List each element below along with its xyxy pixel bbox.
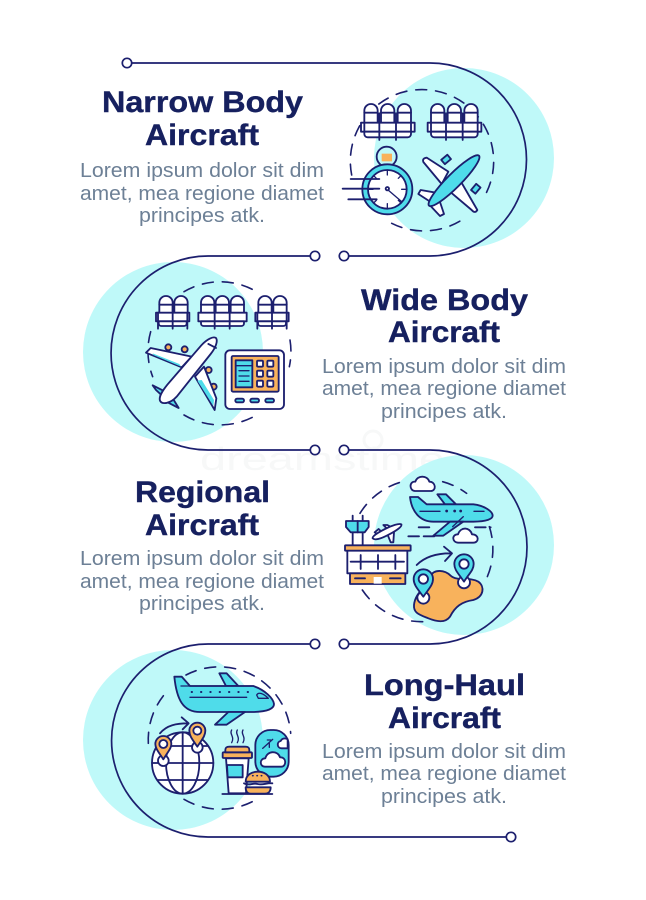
background circle: panel 1 [374,68,554,248]
seats left [361,104,415,140]
large plane [174,673,274,725]
text block: regional description: amet, mea regione diamet [80,571,324,593]
heading: wide body aircraft [361,284,528,349]
icon: narrow body [343,90,494,231]
heading: long-haul aircraft: Long-Haul [364,669,525,702]
cloud top [411,477,435,491]
heading: regional aircraft: Regional [135,476,270,509]
connector line: panel 3 [339,445,527,649]
burger [222,772,272,794]
text block: long-haul description: Lorem ipsum dolor sit dim [322,741,566,763]
terminal [345,545,411,584]
arrow [160,717,189,733]
steam [231,730,244,743]
heading: long-haul aircraft [364,669,525,735]
text block: narrow body description: principes atk. [139,205,265,227]
seats group 3 [255,296,289,329]
heading: narrow body aircraft: Narrow Body [102,86,303,119]
text block: wide body description: principes atk. [381,401,507,423]
text block: wide body description: amet, mea regione diamet [322,378,566,400]
text block: long-haul description [322,741,566,808]
globe [152,732,213,794]
pin left [155,736,171,766]
text block: narrow body description: Lorem ipsum dolor sit dim [80,160,324,182]
background circle: panel 2 [83,262,263,442]
heading: long-haul aircraft: Aircraft [388,702,501,735]
icon: wide body [146,282,291,425]
connector line: panel 2 [111,251,320,455]
background circle: panel 4 [83,650,263,830]
small plane [373,524,401,542]
text block: wide body description [322,356,566,423]
text block: narrow body description: amet, mea regione diamet [80,183,324,205]
stopwatch [343,147,412,214]
text block: regional description: Lorem ipsum dolor sit dim [80,548,324,570]
watermark: dreamstime [200,441,445,477]
window [255,730,289,777]
arrow [417,547,452,565]
background circle: panel 3 [374,455,554,635]
heading: regional aircraft: Aircraft [145,509,259,542]
control tower [346,516,369,545]
watermark [200,431,445,477]
text block: long-haul description: amet, mea regione diamet [322,763,566,785]
text block: wide body description: Lorem ipsum dolor sit dim [322,356,566,378]
island [414,571,483,621]
icon: long-haul [148,667,291,809]
plane [146,337,217,410]
pin right [454,554,474,588]
heading: wide body aircraft: Aircraft [388,316,500,349]
seats right [428,104,481,140]
connector line: panel 4 [112,639,516,842]
plane [418,151,484,216]
connector line: panel 1 [122,58,527,261]
heading: narrow body aircraft: Aircraft [145,119,259,152]
cloud lower [453,529,478,543]
icon: regional [345,477,493,622]
text block: long-haul description: principes atk. [381,786,507,808]
text block: narrow body description [80,160,324,227]
text block: regional description: principes atk. [139,593,265,615]
heading: narrow body aircraft [102,86,303,152]
text block: regional description [80,548,324,615]
pin right [189,723,205,753]
coffee cup [223,747,252,793]
heading: wide body aircraft: Wide Body [361,284,528,317]
seats group 1 [156,296,189,329]
control panel [225,350,284,409]
heading: regional aircraft [135,476,270,542]
large plane [410,494,493,536]
seats group 2 [198,296,247,329]
pin left [414,569,433,604]
